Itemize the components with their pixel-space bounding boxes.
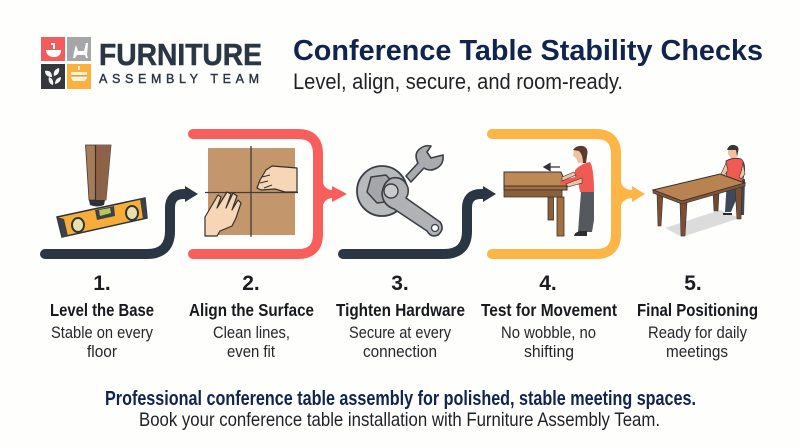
- icon: hands aligning surface: [205, 146, 298, 237]
- description: [51, 323, 153, 361]
- description: No wobble, no: [501, 323, 596, 342]
- icon: person with finished table: [653, 145, 745, 237]
- number: 3.: [391, 272, 409, 295]
- logo tile: grey chair: [67, 37, 91, 61]
- footer call to action: Book your conference table installation with Furniture Assembly Team.: [139, 409, 660, 431]
- logo: [41, 37, 262, 89]
- logo wordmark: FURNITURE: [99, 37, 262, 72]
- number: 5.: [684, 272, 702, 295]
- step 1: [50, 272, 154, 361]
- description: connection: [363, 342, 437, 361]
- description: meetings: [666, 342, 728, 361]
- step 4: [481, 272, 617, 361]
- arrow: amber bracket: [492, 134, 645, 254]
- logo tile: dark leaves: [41, 64, 65, 89]
- logo tagline: ASSEMBLY TEAM: [99, 72, 259, 86]
- heading: Final Positioning: [637, 300, 758, 320]
- description: [213, 323, 290, 361]
- title: Conference Table Stability Checks: [293, 35, 763, 67]
- icon: table leg on spirit level: [57, 145, 147, 237]
- motion arrow: [544, 164, 560, 170]
- heading: Test for Movement: [481, 300, 617, 320]
- step 5: [637, 272, 758, 361]
- subtitle: Level, align, secure, and room-ready.: [293, 69, 623, 94]
- heading: Align the Surface: [189, 300, 314, 320]
- description: shifting: [524, 342, 574, 361]
- icon: wrench and bolt: [357, 146, 443, 236]
- description: even fit: [227, 342, 275, 361]
- step 3: [336, 272, 465, 361]
- arrow: red bracket: [193, 134, 347, 254]
- description: [501, 323, 596, 361]
- heading: Level the Base: [50, 300, 154, 320]
- number: 4.: [539, 272, 557, 295]
- arrow: dark connector 1: [45, 186, 198, 254]
- icon: person pushing table: [504, 146, 594, 236]
- description: floor: [87, 342, 117, 361]
- number: 1.: [93, 272, 111, 295]
- description: Secure at every: [349, 323, 451, 342]
- description: Stable on every: [51, 323, 153, 342]
- description: [349, 323, 451, 361]
- right hand: [257, 166, 297, 192]
- heading: Tighten Hardware: [336, 300, 465, 320]
- left hand: [205, 192, 241, 236]
- logo tile: amber lamp: [67, 64, 91, 89]
- description: [648, 323, 747, 361]
- arrow: dark connector 2: [343, 186, 496, 254]
- description: Ready for daily: [648, 323, 747, 342]
- step 2: [189, 272, 314, 361]
- number: 2.: [242, 272, 260, 295]
- logo tile: red sink: [41, 37, 65, 61]
- description: Clean lines,: [213, 323, 290, 342]
